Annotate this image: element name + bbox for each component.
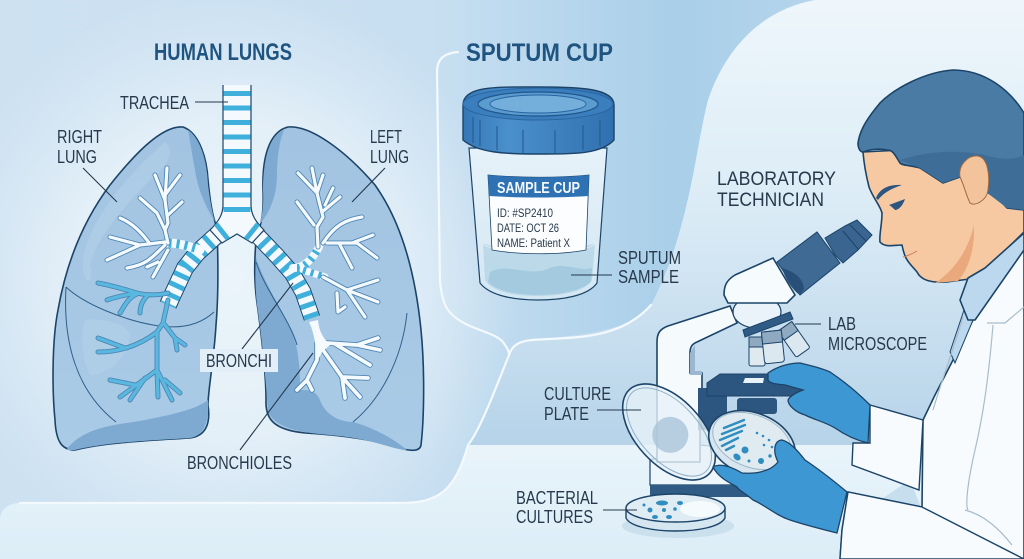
stage [698, 374, 805, 430]
label: culture plate: CULTURE [544, 384, 611, 404]
microscope head [724, 258, 795, 303]
cup label: DATE: OCT 26 [497, 223, 559, 235]
cup lid [463, 87, 614, 154]
label: laboratory technician: LABORATORY [717, 169, 836, 190]
microscope [650, 220, 872, 497]
label: culture plate: PLATE [544, 404, 589, 424]
lungs illustration [53, 85, 424, 450]
cup label: SAMPLE CUP [497, 180, 580, 197]
callout outline: sputum bubble [20, 52, 651, 503]
lower sleeve [840, 492, 1024, 559]
label: bacterial cultures: BACTERIAL [516, 488, 598, 508]
label: bronchi: BRONCHI [206, 351, 272, 371]
label: lab microscope [795, 314, 927, 354]
eye and brow [876, 185, 905, 210]
title: human lungs: HUMAN LUNGS [154, 39, 292, 66]
bacterial culture dish in hand [699, 398, 805, 490]
objectives [733, 296, 810, 366]
label: bronchioles: BRONCHIOLES [187, 453, 292, 473]
label: lab microscope: LAB [828, 314, 856, 334]
microscope base [650, 445, 800, 485]
label: left lung: LUNG [370, 147, 409, 167]
title: sputum cup: SPUTUM CUP [466, 39, 613, 67]
bronchi: right main [168, 233, 219, 305]
lab coat [840, 250, 1024, 559]
sputum cup [463, 87, 614, 300]
label: bacterial cultures [516, 488, 637, 527]
upper sleeve [852, 405, 923, 490]
sputum in cup [483, 234, 595, 296]
cup label: ID: #SP2410 [497, 208, 553, 220]
culture plate lid [605, 367, 733, 497]
ear [960, 156, 989, 204]
cup label [488, 175, 589, 254]
shirt collar [960, 233, 1024, 320]
lower glove [713, 440, 847, 533]
shadow on table [840, 480, 922, 559]
label: laboratory technician: TECHNICIAN [717, 190, 824, 211]
label: sputum sample [571, 248, 681, 287]
label: laboratory technician [717, 169, 836, 211]
trachea [210, 85, 264, 243]
hair [858, 70, 1024, 210]
microscope arm [657, 306, 737, 462]
upper glove [768, 363, 870, 443]
label: right lung: RIGHT [57, 127, 102, 147]
label: trachea: TRACHEA [120, 93, 189, 113]
label: lab microscope: MICROSCOPE [828, 334, 927, 354]
label: bronchioles [187, 353, 313, 473]
left lung [255, 127, 424, 450]
neck and face [863, 150, 1024, 283]
label: left lung [352, 127, 409, 202]
eyepiece [777, 220, 872, 295]
label: sputum sample: SAMPLE [618, 267, 679, 287]
label: sputum sample: SPUTUM [618, 248, 681, 268]
bottom culture dish [622, 494, 734, 538]
label: right lung [57, 127, 117, 202]
cup label: NAME: Patient X [497, 238, 570, 250]
bronchi: left main [255, 233, 325, 318]
label: right lung: LUNG [57, 147, 97, 167]
cup body [469, 148, 607, 300]
label: bronchi [200, 283, 293, 372]
bronchioles: blue lower-left tree [98, 283, 185, 400]
label: culture plate [544, 384, 641, 424]
label: bacterial cultures: CULTURES [516, 507, 593, 527]
bronchioles: upper and mid trees [107, 168, 380, 398]
label: left lung: LEFT [370, 127, 402, 147]
right lung [53, 127, 218, 450]
laboratory technician [713, 70, 1024, 559]
